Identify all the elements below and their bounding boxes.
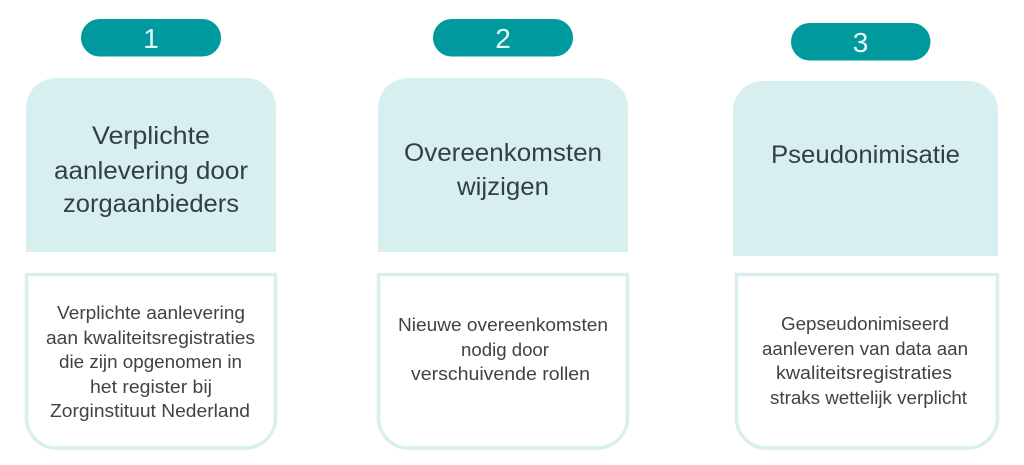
- text card: description 1: [26, 274, 276, 448]
- badge: number 2: [433, 19, 573, 56]
- heading card: Pseudonimisatie: [733, 81, 998, 256]
- text card: description 1: Verplichte aanlevering: [57, 303, 245, 323]
- text card: description 3: kwaliteitsregistraties: [776, 363, 952, 383]
- text card: description 1: het register bij: [90, 377, 212, 397]
- heading card: Verplichte aanlevering door zorgaanbieders: aanlevering door: [54, 157, 248, 185]
- badge: number 1: 1: [143, 23, 159, 54]
- panel: column 2: [378, 19, 628, 448]
- panel: column 1: [26, 19, 276, 448]
- text card: description 3: straks wettelijk verplicht: [770, 388, 967, 408]
- text card: description 2: Nieuwe overeenkomsten: [398, 315, 608, 335]
- heading card: Verplichte aanlevering door zorgaanbieders: Verplichte: [92, 122, 210, 150]
- text card: description 1: die zijn opgenomen in: [59, 352, 242, 372]
- badge: number 1: [81, 19, 221, 56]
- text card: description 2: nodig door: [461, 340, 549, 360]
- text card: description 3: [736, 274, 998, 448]
- badge: number 3: 3: [853, 27, 868, 58]
- text card: description 1: Zorginstituut Nederland: [50, 401, 250, 421]
- text card: description 2: [378, 274, 628, 448]
- panel: column 3: [733, 23, 998, 448]
- heading card: Overeenkomsten wijzigen: Overeenkomsten: [404, 139, 602, 167]
- heading card: Overeenkomsten wijzigen: [378, 78, 628, 252]
- badge: number 3: [791, 23, 930, 60]
- badge: number 2: 2: [495, 23, 511, 54]
- text card: description 3: Gepseudonimiseerd: [781, 314, 949, 334]
- heading card: Verplichte aanlevering door zorgaanbieders: zorgaanbieders: [63, 190, 239, 218]
- text card: description 2: verschuivende rollen: [411, 364, 590, 384]
- text card: description 3: aanleveren van data aan: [762, 339, 968, 359]
- heading card: Pseudonimisatie: Pseudonimisatie: [771, 141, 960, 169]
- text card: description 1: aan kwaliteitsregistraties: [46, 328, 255, 348]
- heading card: Overeenkomsten wijzigen: wijzigen: [456, 173, 549, 201]
- heading card: Verplichte aanlevering door zorgaanbieders: [26, 78, 276, 252]
